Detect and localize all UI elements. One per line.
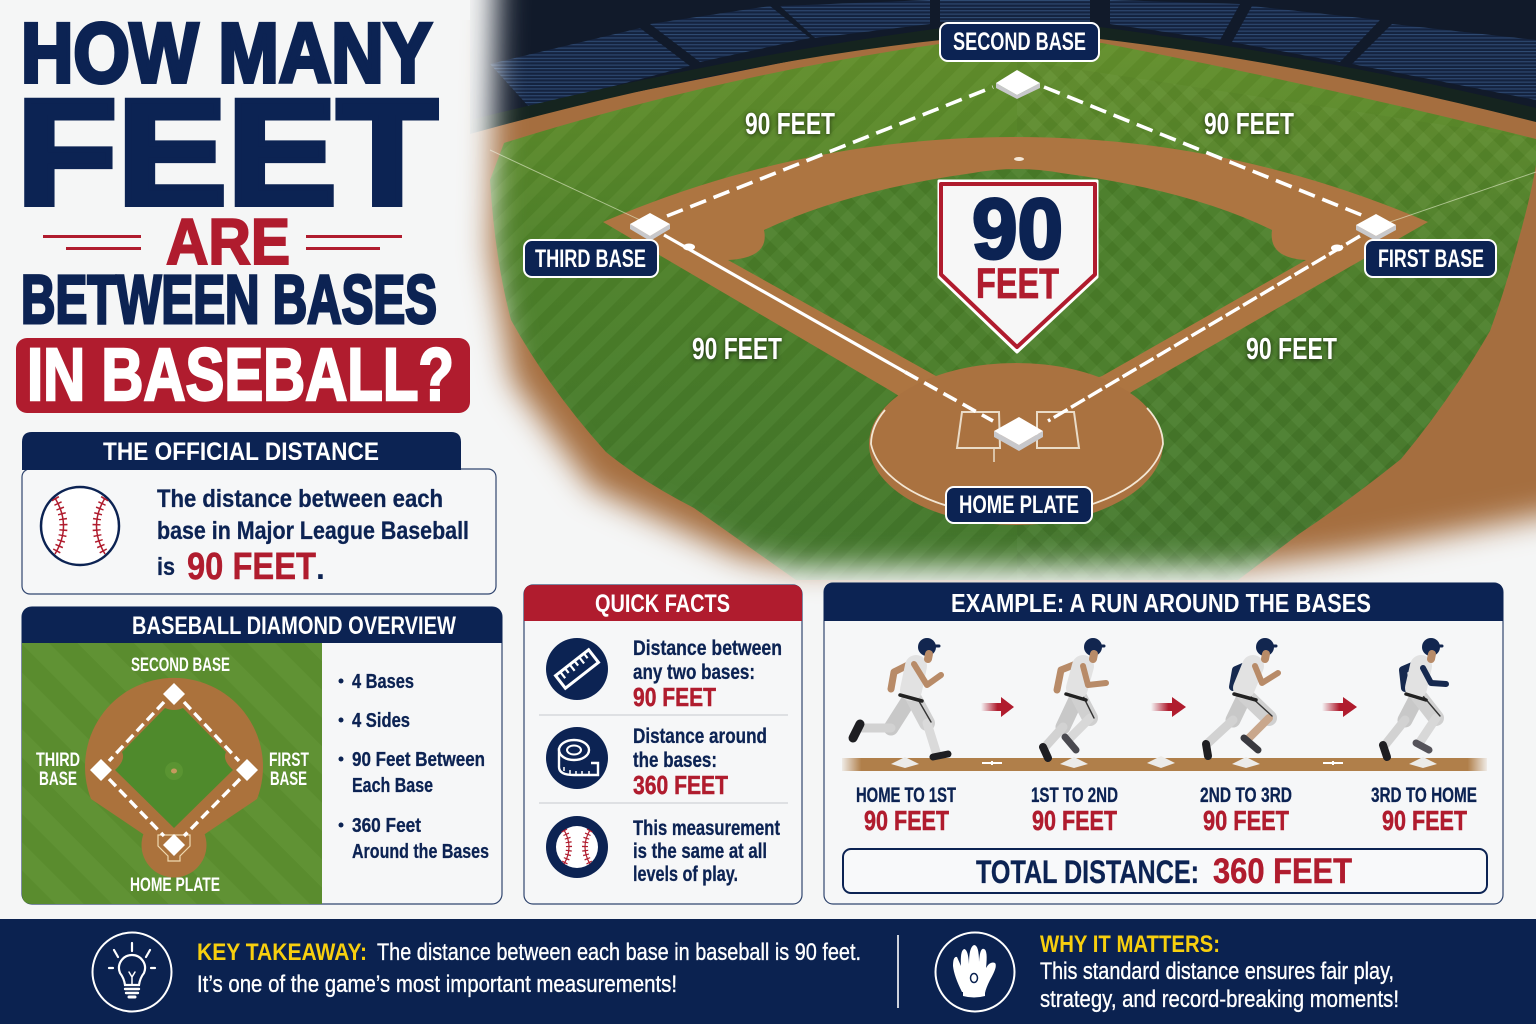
- icon: third base: [630, 213, 670, 241]
- total distance box: [843, 849, 1487, 893]
- icon: first base: [1356, 214, 1396, 241]
- panel: quick facts: the bases:: [633, 749, 717, 772]
- runner: second to third: [1206, 638, 1278, 756]
- leg label: 3rd to home: [1371, 784, 1477, 836]
- diamond facts list: 360 Feet: [352, 815, 421, 837]
- diamond facts list: Each Base: [352, 775, 433, 797]
- panel: quick facts: is the same at all: [633, 840, 767, 863]
- total distance box: 360 FEET: [1213, 852, 1352, 891]
- panel: quick facts: any two bases:: [633, 661, 755, 684]
- leg label: 2nd to 3rd: 2ND TO 3RD: [1200, 784, 1292, 807]
- badge: 90 feet home plate shield: [939, 181, 1097, 352]
- baseline: second to first: [1044, 87, 1364, 216]
- leg label: 2nd to 3rd: [1200, 784, 1292, 836]
- leg label: home to 1st: [856, 784, 956, 836]
- label: first base: [1365, 240, 1496, 277]
- runner: third to home: [1383, 638, 1446, 757]
- footer band: [0, 919, 1536, 1024]
- title: BETWEEN BASES: [21, 261, 437, 338]
- panel: the official distance: base in Major League Baseball: [157, 517, 469, 545]
- runner: home to first: [853, 638, 948, 757]
- footer band: strategy, and record-breaking moments!: [1040, 986, 1399, 1013]
- icon: light bulb: [92, 932, 172, 1012]
- leg label: 2nd to 3rd: 90 FEET: [1203, 805, 1289, 836]
- panel: the official distance: .: [316, 550, 325, 586]
- baseline: third to home: [664, 235, 993, 421]
- diamond facts list: 90 Feet Between: [352, 749, 485, 771]
- label: second base: SECOND BASE: [953, 28, 1086, 56]
- leg label: home to 1st: 90 FEET: [864, 805, 949, 836]
- leg label: 3rd to home: 90 FEET: [1382, 805, 1467, 836]
- diamond facts list: 4 Sides: [352, 710, 410, 732]
- panel: the official distance: 90 FEET: [187, 546, 316, 588]
- label: second base: [940, 23, 1099, 61]
- infield dirt: [603, 137, 1428, 396]
- label: first base: FIRST BASE: [1378, 245, 1484, 273]
- icon: baseball: [41, 487, 119, 565]
- panel: baseball diamond overview: [22, 607, 502, 904]
- footer band: This standard distance ensures fair play,: [1040, 958, 1394, 985]
- panel: quick facts: Distance between: [633, 637, 782, 660]
- runner: first to second: [1043, 638, 1106, 758]
- footer band: The distance between each base in baseball is 90 feet.: [377, 939, 861, 966]
- leg label: 1st to 2nd: 90 FEET: [1032, 805, 1117, 836]
- badge: 90 feet home plate shield: FEET: [976, 260, 1059, 308]
- icon: tape measure: [546, 727, 608, 789]
- arrow: [1151, 697, 1186, 717]
- panel: the official distance: [22, 432, 496, 594]
- baseline: third to second: [667, 87, 993, 216]
- arrow: [1322, 697, 1357, 717]
- stadium field photo: [440, 0, 1536, 620]
- distance label: second to first: 90 FEET: [1204, 106, 1294, 141]
- title: [16, 6, 470, 416]
- title: FEET: [16, 68, 438, 236]
- diamond diagram: BASE: [39, 769, 77, 790]
- leg label: 3rd to home: 3RD TO HOME: [1371, 784, 1477, 807]
- distance label: first to home: 90 FEET: [1246, 331, 1337, 366]
- distance label: third to second: 90 FEET: [745, 106, 835, 141]
- leg label: 1st to 2nd: 1ST TO 2ND: [1031, 784, 1118, 807]
- label: home plate: [946, 487, 1092, 523]
- icon: baseball: [546, 816, 608, 878]
- dirt base path strip: [842, 756, 1487, 771]
- panel: quick facts: levels of play.: [633, 863, 738, 886]
- footer band: It’s one of the game’s most important measurements!: [197, 971, 677, 998]
- icon: ruler: [546, 638, 608, 700]
- home plate circle: [869, 363, 1163, 525]
- leg label: home to 1st: HOME TO 1ST: [856, 784, 956, 807]
- icon: home plate: [994, 417, 1043, 451]
- infield grass: [728, 169, 1306, 378]
- panel: example run around the bases: EXAMPLE: A RUN AROUND THE BASES: [951, 588, 1371, 618]
- panel: the official distance: THE OFFICIAL DISTANCE: [103, 438, 379, 466]
- panel: the official distance: is: [157, 553, 175, 581]
- title: ARE: [166, 205, 290, 278]
- baseline: first to home: [1048, 236, 1360, 421]
- arrow: [981, 697, 1014, 717]
- diamond diagram: FIRST: [269, 750, 309, 771]
- label: third base: THIRD BASE: [535, 245, 646, 273]
- panel: baseball diamond overview: BASEBALL DIAMOND OVERVIEW: [132, 612, 456, 640]
- outfield and foul grass: [490, 43, 1536, 580]
- label: third base: [524, 240, 658, 277]
- icon: second base: [996, 70, 1040, 99]
- label: home plate: HOME PLATE: [959, 491, 1079, 519]
- icon: baseball glove: [936, 932, 1014, 1012]
- panel: quick facts: 360 FEET: [633, 770, 728, 800]
- title: HOW MANY: [21, 6, 432, 100]
- panel: example run around the bases: [824, 583, 1503, 904]
- badge: 90 feet home plate shield: 90: [972, 182, 1063, 277]
- diamond facts list: [338, 671, 489, 863]
- diamond diagram: THIRD: [36, 750, 80, 771]
- diamond diagram: HOME PLATE: [130, 875, 220, 896]
- panel: the official distance: The distance between each: [157, 485, 443, 513]
- distance label: third to home: 90 FEET: [692, 331, 782, 366]
- panel: quick facts: This measurement: [633, 817, 780, 840]
- diamond diagram: [22, 643, 322, 904]
- diamond diagram: SECOND BASE: [131, 655, 230, 676]
- footer band: KEY TAKEAWAY:: [197, 939, 367, 966]
- title: IN BASEBALL?: [27, 333, 454, 416]
- leg label: 1st to 2nd: [1031, 784, 1118, 836]
- total distance box: TOTAL DISTANCE:: [976, 854, 1199, 890]
- diamond diagram: BASE: [270, 769, 307, 790]
- panel: quick facts: Distance around: [633, 725, 767, 748]
- diamond facts list: Around the Bases: [352, 841, 489, 863]
- panel: quick facts: 90 FEET: [633, 682, 716, 712]
- diamond facts list: 4 Bases: [352, 671, 414, 693]
- panel: quick facts: [524, 585, 802, 904]
- footer band: WHY IT MATTERS:: [1040, 931, 1220, 958]
- panel: quick facts: QUICK FACTS: [595, 590, 730, 618]
